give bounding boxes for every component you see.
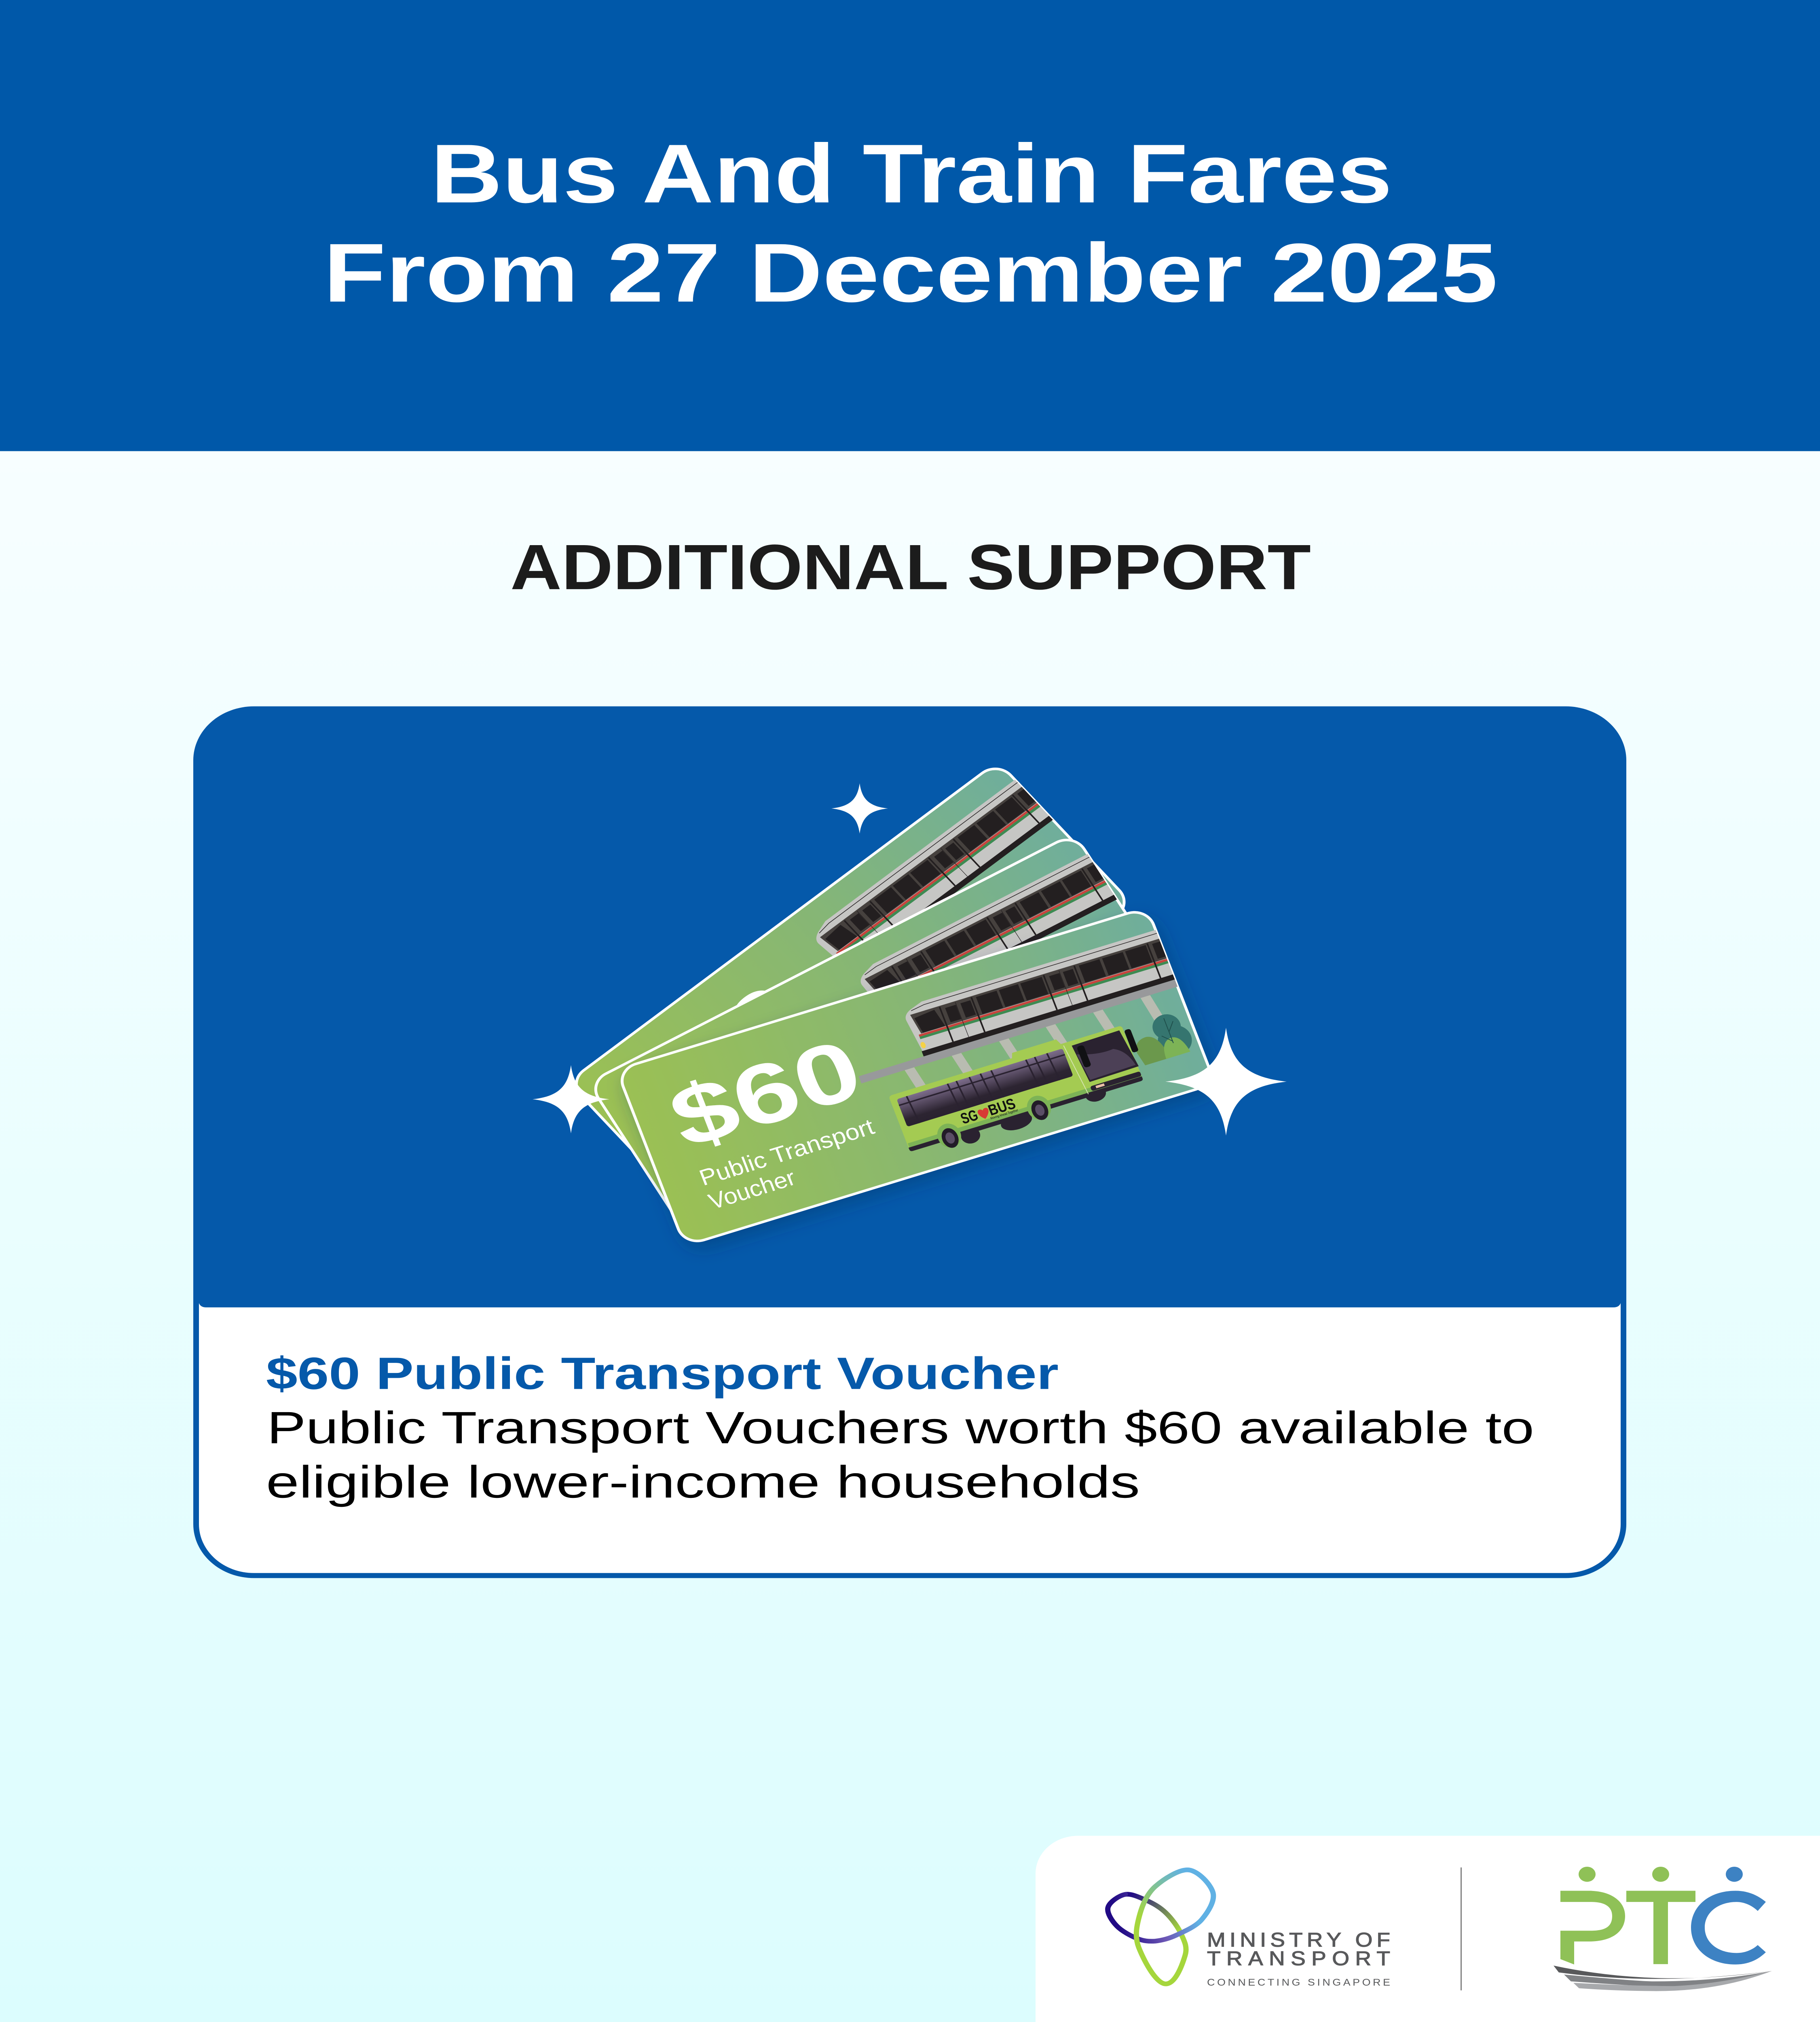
bus logo: BUS — [986, 1095, 1018, 1119]
header band — [0, 0, 1820, 451]
logo: Ministry of Transport: TRANSPORT — [1207, 1948, 1390, 1970]
bus — [887, 1018, 1153, 1161]
viaduct beam — [859, 979, 1179, 1083]
voucher card: middle: $60 — [630, 997, 850, 1165]
voucher description: $60 Public Transport Voucher — [266, 1348, 1059, 1399]
title: From 27 December 2025 — [323, 226, 1498, 319]
logo: Ministry of Transport: MINISTRY OF — [1207, 1929, 1390, 1951]
trees — [1127, 1009, 1196, 1066]
voucher amount: $60 — [657, 1022, 875, 1166]
panel: voucher card — [193, 706, 1626, 1578]
voucher card: back — [575, 768, 1126, 1150]
panel: logos — [1036, 1836, 1820, 2022]
voucher card: back: $60 — [609, 966, 825, 1148]
illustration: fanned vouchers — [533, 736, 1287, 1246]
icon: sparkle top — [831, 783, 888, 833]
bus logo: Moving Ahead Together — [990, 1108, 1019, 1121]
voucher label: Voucher — [705, 1165, 799, 1214]
voucher description: eligible lower-income households — [266, 1457, 1140, 1508]
bus logo: SG — [958, 1107, 981, 1127]
title — [323, 127, 1498, 319]
page background — [0, 451, 1820, 2022]
voucher card: front — [617, 894, 1258, 1246]
viaduct pillars — [905, 993, 1173, 1110]
bus logo — [958, 1095, 1019, 1129]
logo: Ministry of Transport: CONNECTING SINGAPORE — [1207, 1978, 1390, 1988]
section heading: ADDITIONAL SUPPORT — [510, 531, 1311, 603]
voucher description — [266, 1348, 1534, 1508]
icon: sparkle right — [1165, 1028, 1287, 1136]
voucher description: Public Transport Vouchers worth $60 available to — [267, 1402, 1534, 1453]
icon: sparkle left — [533, 1065, 609, 1134]
voucher card: middle — [594, 839, 1127, 1211]
voucher label: Public Transport — [696, 1114, 878, 1191]
train — [901, 917, 1218, 1058]
logo: PTC — [1554, 1867, 1772, 1991]
logo: Ministry of Transport — [1108, 1870, 1390, 1988]
title: Bus And Train Fares — [431, 127, 1392, 220]
